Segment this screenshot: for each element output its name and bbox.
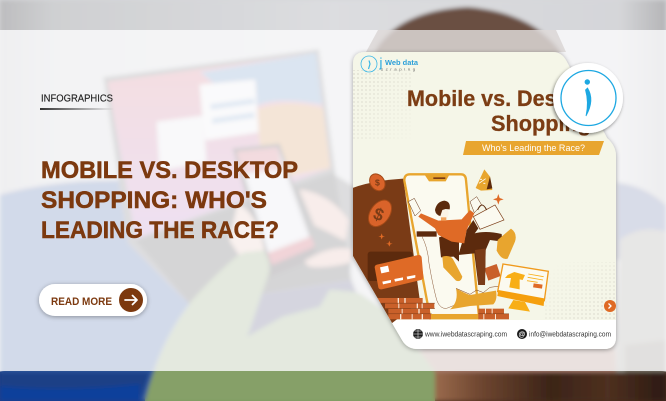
subtitle ribbon — [463, 141, 604, 155]
read more button: READ MORE — [51, 296, 112, 308]
card logo — [361, 55, 419, 72]
website contact — [413, 329, 507, 339]
main heading: LEADING THE RACE? — [41, 217, 279, 244]
card title — [408, 90, 589, 136]
card footer — [390, 320, 616, 349]
coin stacks — [375, 298, 509, 319]
card title: Shopping — [491, 111, 591, 136]
brown wall — [352, 179, 420, 323]
halftone dots — [353, 70, 616, 320]
read more button — [39, 284, 147, 316]
coins: $ — [375, 178, 380, 188]
subtitle ribbon: Who's Leading the Race? — [482, 143, 585, 154]
decorative sleeve and body — [145, 250, 440, 401]
website contact: www.iwebdatascraping.com — [424, 332, 507, 338]
parcel box — [484, 264, 501, 281]
card logo: Web data — [385, 58, 419, 67]
main heading — [41, 157, 298, 244]
coins: $ — [371, 203, 387, 225]
email contact: info@iwebdatascraping.com — [529, 332, 611, 338]
next arrow — [604, 300, 616, 312]
main heading: SHOPPING: WHO'S — [41, 187, 267, 214]
price tag — [476, 169, 492, 191]
email contact: @ — [518, 332, 526, 338]
email contact — [517, 329, 611, 339]
coins — [368, 173, 392, 228]
main heading: MOBILE VS. DESKTOP — [41, 157, 298, 184]
shopper figure — [408, 197, 516, 285]
round logo badge — [553, 63, 623, 133]
illustration: shopper leaping out of phone — [352, 169, 548, 323]
category label — [40, 92, 114, 110]
card title: Mobile vs. Desktop — [407, 86, 602, 111]
phone — [404, 174, 479, 319]
desktop monitor — [497, 264, 548, 312]
infographic preview card — [352, 52, 616, 349]
receipt — [417, 231, 501, 309]
card logo: scraping — [381, 66, 415, 72]
category label: INFOGRAPHICS — [41, 92, 113, 104]
credit card — [375, 255, 423, 289]
card logo: j — [378, 55, 382, 70]
sparkles — [378, 194, 504, 247]
